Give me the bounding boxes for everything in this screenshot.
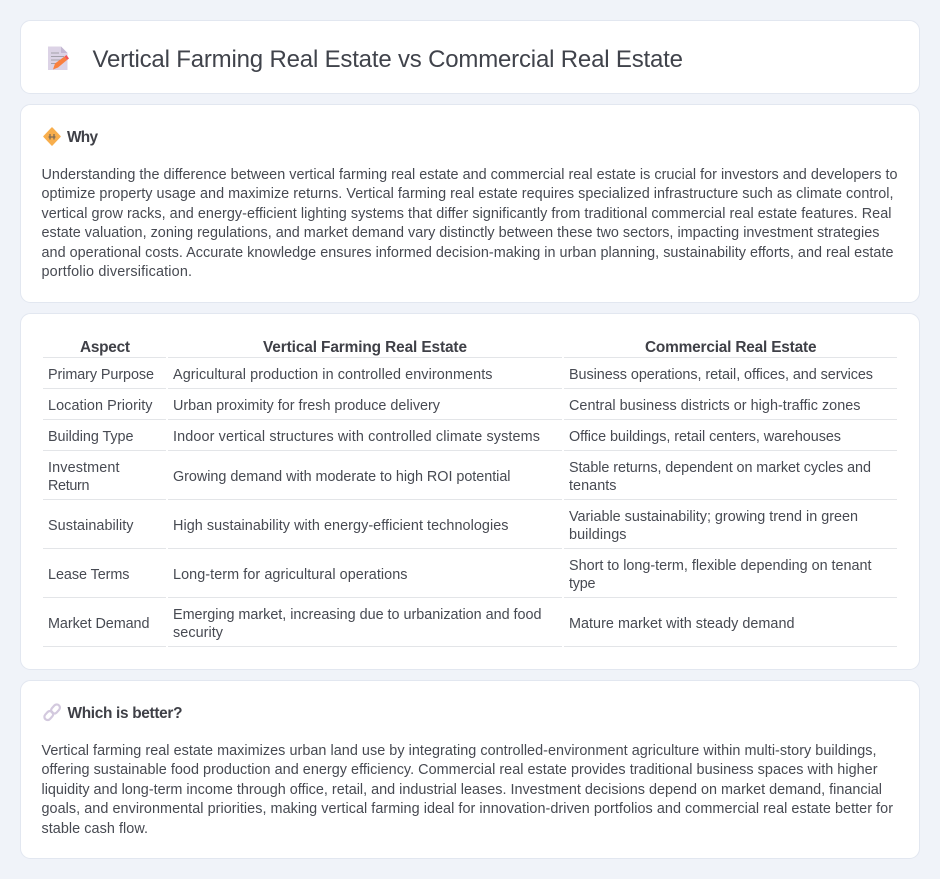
row: market demand (48, 607, 794, 641)
table header row: Commercial Real Estate (645, 339, 817, 356)
row: primary purpose: Primary Purpose (48, 367, 154, 383)
panel: comparison table (20, 314, 920, 670)
table header row: Vertical Farming Real Estate (263, 339, 467, 356)
panel: which is better (20, 680, 920, 858)
text block: why paragraph: vertical grow racks, and energy-efficient lighting systems that differ significantly from traditional commercial real estate features. Real (42, 206, 892, 222)
row: building type (48, 429, 841, 445)
row: building type: Indoor vertical structures with controlled climate systems (173, 429, 540, 445)
panel: why (20, 104, 920, 302)
text block: why paragraph: Understanding the difference between vertical farming real estate and commercial real estate is crucial for investors and developers to (42, 167, 898, 183)
row: lease terms: Short to long-term, flexible depending on tenant (569, 558, 872, 574)
text block: which is better paragraph: offering sustainable food production and energy efficiency. Commercial real estate provides traditional business spaces with higher (42, 762, 878, 778)
row: market demand: Mature market with steady demand (569, 616, 794, 632)
row: market demand: Market Demand (48, 616, 150, 632)
row: building type: Building Type (48, 429, 134, 445)
row: building type: Office buildings, retail centers, warehouses (569, 429, 841, 445)
heading: which is better: Which is better? (68, 705, 182, 722)
title: Vertical Farming Real Estate vs Commercial Real Estate (92, 46, 683, 73)
row: lease terms: type (569, 576, 596, 592)
text block: why paragraph: estate valuation, zoning regulations, and market demand vary distinctly between these two sectors, impacting investment strategies (42, 225, 880, 241)
row: primary purpose: Agricultural production in controlled environments (173, 367, 492, 383)
row: investment return: Investment (48, 460, 120, 476)
row: sustainability (48, 509, 858, 543)
row: market demand: Emerging market, increasing due to urbanization and food (173, 607, 542, 623)
row: location priority (48, 398, 860, 414)
row: lease terms (48, 558, 872, 592)
row: investment return: tenants (569, 478, 616, 494)
text block: why paragraph (42, 167, 898, 280)
row: investment return: Stable returns, dependent on market cycles and (569, 460, 871, 476)
text block: why paragraph: optimize property usage and maximize returns. Vertical farming real estate requires specialized infrastructure such as climate control, (42, 186, 894, 202)
row: market demand: security (173, 625, 224, 641)
row: sustainability: buildings (569, 527, 626, 543)
icon: link (43, 703, 61, 721)
text block: which is better paragraph (42, 743, 893, 837)
icon: diamond warning sign (44, 128, 60, 145)
row: location priority: Urban proximity for fresh produce delivery (173, 398, 441, 414)
row: location priority: Central business districts or high-traffic zones (569, 398, 860, 414)
row: investment return: Return (48, 478, 90, 494)
panel: header (20, 20, 920, 94)
row: lease terms: Long-term for agricultural operations (173, 567, 408, 583)
row: investment return: Growing demand with moderate to high ROI potential (173, 469, 510, 485)
text block: why paragraph: portfolio diversification. (42, 264, 192, 280)
text block: which is better paragraph: goals, and environmental priorities, making vertical farming ideal for innovation-driven portfolios and commercial real estate better for (42, 801, 893, 817)
row: sustainability: Variable sustainability; growing trend in green (569, 509, 858, 525)
row: investment return (48, 460, 871, 494)
row: sustainability: High sustainability with energy-efficient technologies (173, 518, 508, 534)
text block: which is better paragraph: stable cash flow. (42, 821, 148, 837)
table header row: Aspect (80, 339, 130, 356)
icon: document with pencil (48, 46, 69, 70)
row: sustainability: Sustainability (48, 518, 134, 534)
text block: which is better paragraph: liquidity and long-term income through office, retail, and industrial leases. Investment decisions depend on market demand, financial (42, 782, 882, 798)
text block: why paragraph: and operational costs. Accurate knowledge ensures informed decision-making in urban planning, sustainability efforts, and real estate (42, 245, 894, 261)
row: primary purpose: Business operations, retail, offices, and services (569, 367, 873, 383)
text block: which is better paragraph: Vertical farming real estate maximizes urban land use by integrating controlled-environment agriculture within multi-story buildings, (42, 743, 876, 759)
row: lease terms: Lease Terms (48, 567, 130, 583)
row: location priority: Location Priority (48, 398, 153, 414)
row: primary purpose (48, 367, 873, 383)
table header row (80, 339, 817, 356)
heading: why: Why (67, 129, 98, 146)
